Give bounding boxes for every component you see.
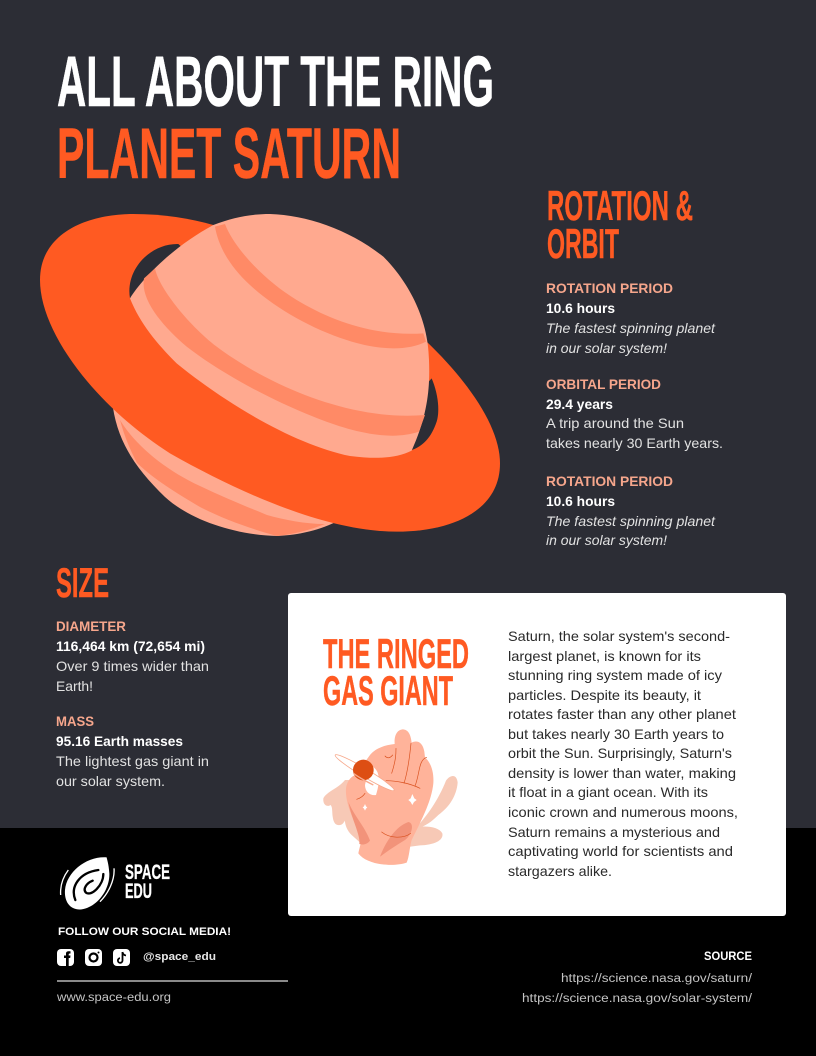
text block: diameter: Earth! bbox=[56, 678, 93, 694]
heading: rotation and orbit: ORBIT bbox=[547, 220, 619, 267]
text: social handle: @space_edu bbox=[143, 951, 216, 963]
ring bbox=[40, 214, 500, 532]
text block: Saturn description bbox=[508, 628, 738, 879]
heading: size: SIZE bbox=[56, 559, 109, 606]
ring gaps bbox=[129, 244, 438, 451]
heading: the ringed gas giant: GAS GIANT bbox=[323, 667, 453, 714]
text block: orbital period: takes nearly 30 Earth years. bbox=[546, 435, 723, 451]
text block: Saturn description: iconic crown and numerous moons, bbox=[508, 804, 738, 820]
text block: rotation period repeated: ROTATION PERIOD bbox=[546, 473, 673, 489]
text block: source: SOURCE bbox=[704, 951, 752, 963]
text block: Saturn description: stunning ring system made of icy bbox=[508, 667, 722, 683]
logo: Space Edu: EDU bbox=[125, 880, 152, 903]
text block: rotation period repeated: The fastest spinning planet bbox=[546, 513, 716, 529]
text block: Saturn description: particles. Despite its beauty, it bbox=[508, 687, 701, 703]
title bbox=[57, 43, 494, 194]
text block: mass: our solar system. bbox=[56, 773, 165, 789]
text block: Saturn description: stargazers alike. bbox=[508, 863, 612, 879]
text block: rotation period bbox=[546, 280, 716, 356]
heading: rotation and orbit: ROTATION & bbox=[547, 182, 693, 229]
icon: tiktok bbox=[113, 949, 130, 966]
text block: diameter: DIAMETER bbox=[56, 618, 126, 634]
text block: orbital period: A trip around the Sun bbox=[546, 415, 684, 431]
text block: Saturn description: density is lower than water, making bbox=[508, 765, 736, 781]
icon: facebook bbox=[57, 949, 74, 966]
planet upper body bbox=[130, 214, 429, 458]
text block: diameter bbox=[56, 618, 209, 694]
icon: hand holding Saturn bbox=[323, 729, 458, 865]
text: follow our social media: FOLLOW OUR SOCIAL MEDIA! bbox=[58, 926, 231, 938]
footer bbox=[56, 857, 753, 1005]
text block: Saturn description: orbit the Sun. Surprisingly, Saturn's bbox=[508, 745, 732, 761]
text block: mass: MASS bbox=[56, 713, 94, 729]
heading: the ringed gas giant bbox=[323, 630, 469, 714]
planet lower body bbox=[112, 400, 340, 536]
logo: Space Edu: SPACE bbox=[125, 861, 170, 884]
text block: Saturn description: Saturn remains a mysterious and bbox=[508, 824, 720, 840]
text block: Saturn description: Saturn, the solar system's second- bbox=[508, 628, 730, 644]
text block: orbital period: 29.4 years bbox=[546, 396, 613, 412]
illustration: Saturn planet with ring bbox=[40, 214, 500, 536]
text block: rotation period repeated: in our solar system! bbox=[546, 532, 667, 548]
text block: source bbox=[522, 951, 753, 1005]
text block: rotation period repeated: 10.6 hours bbox=[546, 493, 615, 509]
text block: diameter: 116,464 km (72,654 mi) bbox=[56, 638, 205, 654]
text block: Saturn description: it float in a giant ocean. With its bbox=[508, 784, 708, 800]
text block: rotation period: The fastest spinning planet bbox=[546, 320, 716, 336]
icon: instagram bbox=[85, 949, 102, 966]
planet stripe one bbox=[215, 224, 426, 348]
text block: rotation period: in our solar system! bbox=[546, 340, 667, 356]
text block: Saturn description: largest planet, is known for its bbox=[508, 648, 701, 664]
text block: Saturn description: rotates faster than any other planet bbox=[508, 706, 736, 722]
text block: source: https://science.nasa.gov/solar-system/ bbox=[522, 993, 753, 1005]
text block: rotation period: ROTATION PERIOD bbox=[546, 280, 673, 296]
text block: rotation period repeated bbox=[546, 473, 716, 548]
text block: mass bbox=[56, 713, 209, 789]
title: PLANET SATURN bbox=[57, 115, 401, 194]
panel: rotation and orbit bbox=[546, 182, 723, 548]
text block: mass: The lightest gas giant in bbox=[56, 753, 209, 769]
text block: rotation period: 10.6 hours bbox=[546, 300, 615, 316]
text block: diameter: Over 9 times wider than bbox=[56, 658, 209, 674]
text block: orbital period: ORBITAL PERIOD bbox=[546, 376, 661, 392]
logo: Space Edu bbox=[61, 857, 170, 909]
text block: source: https://science.nasa.gov/saturn/ bbox=[561, 973, 753, 985]
text: website: www.space-edu.org bbox=[56, 992, 171, 1004]
heading: the ringed gas giant: THE RINGED bbox=[323, 630, 469, 677]
text block: Saturn description: but takes nearly 30 Earth years to bbox=[508, 726, 724, 742]
planet stripe two bbox=[144, 268, 425, 436]
panel: the ringed gas giant bbox=[288, 593, 786, 916]
panel: size bbox=[56, 559, 209, 789]
heading: rotation and orbit bbox=[547, 182, 693, 267]
icon: galaxy swirl bbox=[61, 857, 114, 909]
text block: orbital period bbox=[546, 376, 723, 451]
title: ALL ABOUT THE RING bbox=[57, 43, 494, 122]
text block: Saturn description: captivating world for scientists and bbox=[508, 843, 733, 859]
text block: mass: 95.16 Earth masses bbox=[56, 733, 183, 749]
